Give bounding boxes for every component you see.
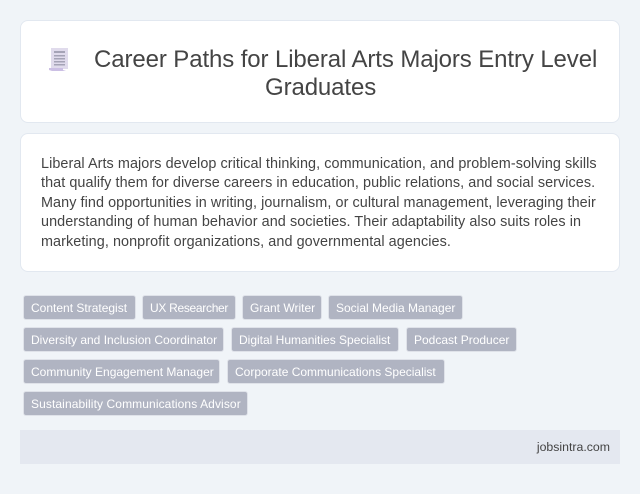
text block: description: Many find opportunities in writing, journalism, or cultural management, leveraging their: [41, 195, 596, 211]
text block: description: [41, 156, 597, 250]
text block: description: Liberal Arts majors develop critical thinking, communication, and problem-solving skills: [41, 156, 597, 172]
tag: Sustainability Communications Advisor: Sustainability Communications Advisor: [31, 397, 241, 411]
text block: description: that qualify them for diverse careers in education, public relations, and social services.: [41, 175, 595, 191]
tag: Digital Humanities Specialist: Digital Humanities Specialist: [239, 333, 390, 347]
tag: Podcast Producer: [406, 327, 517, 352]
panel: description: [20, 133, 620, 272]
tag: Diversity and Inclusion Coordinator: [23, 327, 224, 352]
tag: Corporate Communications Specialist: [227, 359, 445, 384]
tag: Social Media Manager: Social Media Manager: [336, 301, 455, 315]
tag: Grant Writer: [242, 295, 322, 320]
footer text: jobsintra.com: [537, 440, 610, 454]
title: [94, 46, 597, 101]
panel: career tags: [23, 295, 517, 416]
title: Career Paths for Liberal Arts Majors Entry Level: [94, 46, 597, 73]
tag: Content Strategist: [23, 295, 136, 320]
icon: document scroll: [49, 48, 68, 71]
tag: Sustainability Communications Advisor: [23, 391, 248, 416]
tag: Social Media Manager: [328, 295, 463, 320]
tag: UX Researcher: UX Researcher: [150, 301, 228, 315]
title: Graduates: [265, 74, 376, 101]
text block: description: understanding of human behavior and societies. Their adaptability also suits roles in: [41, 214, 581, 230]
panel: title header: [20, 20, 620, 123]
tag: Community Engagement Manager: Community Engagement Manager: [31, 365, 214, 379]
tag: Podcast Producer: Podcast Producer: [414, 333, 509, 347]
tag: Corporate Communications Specialist: Corporate Communications Specialist: [235, 365, 436, 379]
tag: Content Strategist: Content Strategist: [31, 301, 127, 315]
tag: Community Engagement Manager: [23, 359, 220, 384]
tag: Diversity and Inclusion Coordinator: Diversity and Inclusion Coordinator: [31, 333, 217, 347]
footer bar: [20, 430, 620, 464]
tag: Grant Writer: Grant Writer: [250, 301, 315, 315]
tag: Digital Humanities Specialist: [231, 327, 399, 352]
tag: UX Researcher: [142, 295, 236, 320]
text block: description: marketing, nonprofit organizations, and governmental agencies.: [41, 234, 451, 250]
